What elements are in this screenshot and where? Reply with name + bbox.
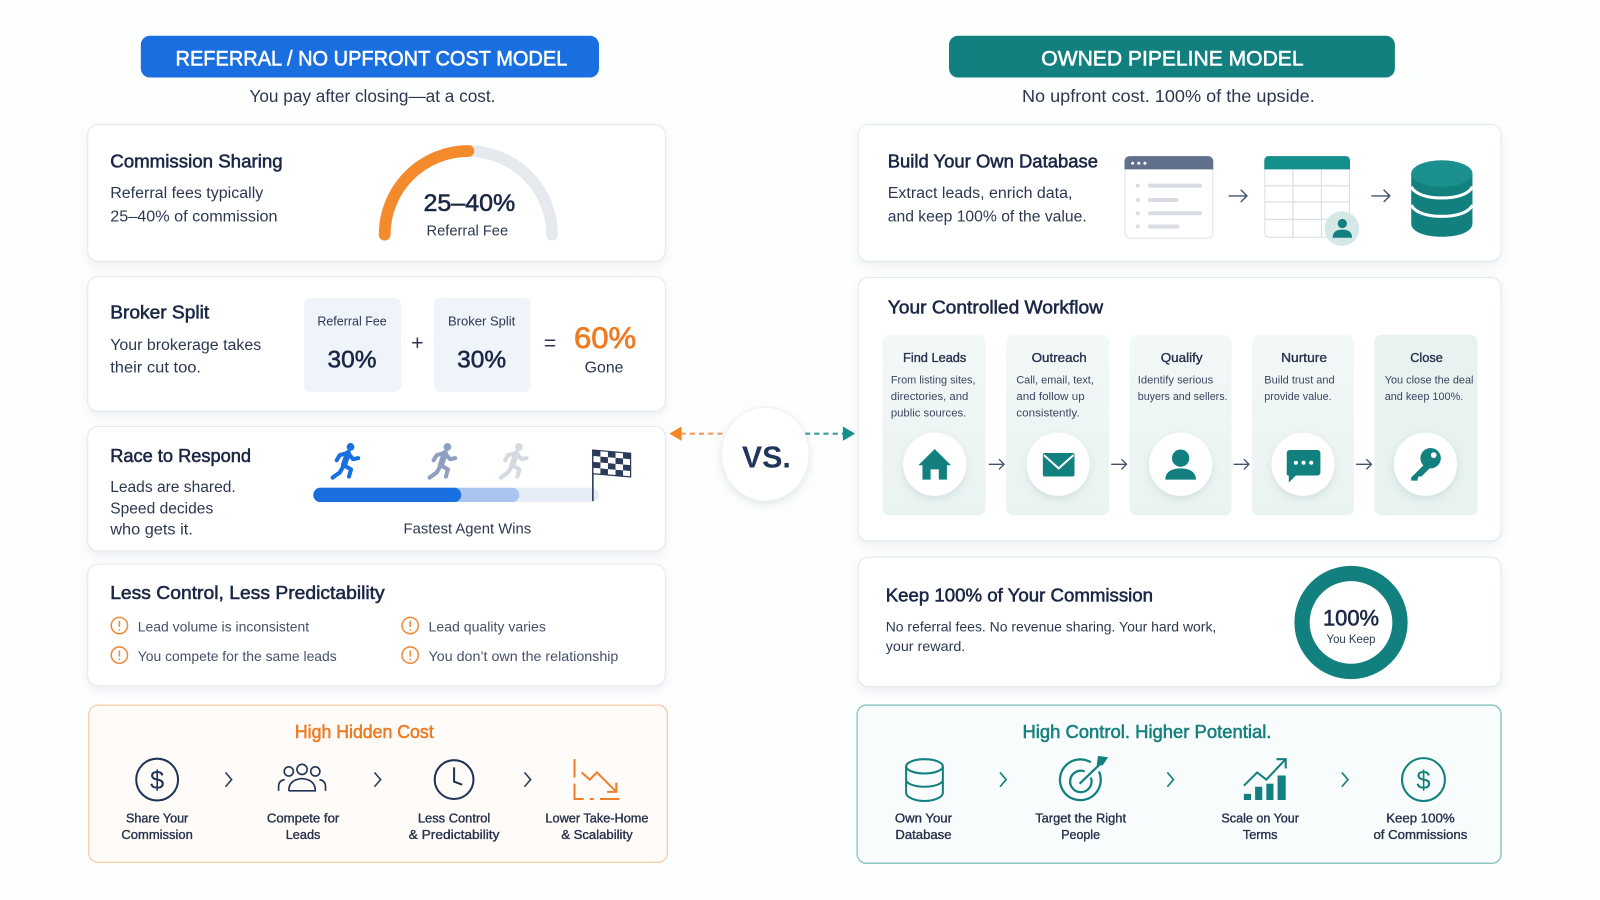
chevron [1000, 772, 1006, 787]
icon: browser list [1124, 156, 1213, 238]
step: outreach: consistently. [1016, 407, 1080, 419]
panel: your controlled workflow [858, 278, 1501, 541]
chevron [524, 772, 531, 787]
gauge chart: Referral Fee [427, 224, 508, 240]
step labels: compete for leads: Compete for [267, 810, 340, 825]
step: nurture: provide value. [1264, 391, 1332, 403]
step labels: keep 100% of commissions: Keep 100% [1386, 810, 1455, 825]
step: qualify [1130, 335, 1232, 515]
referral fee box [304, 298, 401, 392]
runner: leader [333, 443, 358, 478]
broker split box: Broker Split [448, 314, 516, 329]
total: 60% gone [574, 322, 636, 376]
step: qualify: Qualify [1161, 350, 1203, 365]
step labels: share your commission: Commission [121, 827, 193, 842]
description: No referral fees. No revenue sharing. Your hard work, [886, 620, 1216, 636]
description: Extract leads, enrich data, [888, 185, 1072, 202]
icon: clock [435, 760, 473, 799]
step: close: You close the deal [1385, 375, 1473, 387]
step: qualify: Identify serious [1138, 375, 1214, 387]
step: close [1374, 335, 1478, 515]
total: 60% gone: 60% [574, 322, 636, 355]
runner: third [501, 443, 527, 478]
description: their cut too. [110, 359, 201, 376]
description [110, 337, 262, 376]
left header: referral model [141, 36, 599, 78]
icon: target with arrow [1060, 757, 1106, 800]
bar caption: Fastest Agent Wins [404, 522, 531, 538]
left subtitle: You pay after closing—at a cost. [249, 86, 495, 106]
step: outreach [1006, 335, 1109, 515]
total: 60% gone: Gone [585, 359, 623, 376]
heading: Build Your Own Database [888, 150, 1098, 171]
step: find leads: directories, and [891, 391, 968, 403]
icon: database [1411, 160, 1472, 237]
broker split box [434, 298, 531, 392]
step labels: scale on your terms [1221, 810, 1300, 842]
warning: lead volume: Lead volume is inconsistent [138, 620, 309, 635]
step labels: less control [409, 810, 500, 842]
step: close: Close [1410, 350, 1443, 365]
heading: Race to Respond [110, 445, 251, 466]
vs badge: VS. [742, 440, 791, 474]
warning: same leads: You compete for the same leads [138, 649, 337, 664]
right header: owned pipeline model: OWNED PIPELINE MODEL [1041, 47, 1304, 70]
step labels: lower take-home: & Scalability [561, 827, 633, 842]
panel: less control, less predictability [88, 564, 665, 686]
step labels: compete for leads [267, 810, 340, 842]
arrow [1371, 190, 1390, 202]
step labels: share your commission: Share Your [126, 810, 189, 825]
panel: commission sharing [88, 124, 665, 261]
right subtitle: No upfront cost. 100% of the upside. [1022, 86, 1315, 106]
panel: high hidden cost [89, 705, 667, 862]
panel: build your own database [858, 124, 1501, 261]
step labels: own your database: Own Your [895, 810, 953, 825]
step labels: scale on your terms: Terms [1243, 827, 1278, 842]
step labels: less control: & Predictability [409, 827, 500, 842]
arrow [989, 459, 1004, 469]
step labels: keep 100% of commissions [1373, 810, 1467, 842]
step: find leads: public sources. [891, 407, 966, 419]
referral fee box: 30% [328, 346, 377, 373]
chevron [1167, 772, 1173, 787]
donut chart: 100% [1302, 573, 1400, 671]
runner: second [430, 443, 455, 478]
step labels: less control: Less Control [418, 810, 490, 825]
panel: high control higher potential [857, 705, 1501, 863]
step: nurture: Nurture [1281, 350, 1327, 365]
description: your reward. [886, 639, 965, 655]
description: Leads are shared. [110, 479, 236, 496]
arrow [1111, 459, 1127, 469]
right header: owned pipeline model [949, 36, 1395, 78]
icon: database outline [906, 759, 943, 801]
step labels: target the right people [1035, 810, 1126, 842]
warning: relationship: You don’t own the relationship [429, 649, 619, 664]
arrow [1234, 459, 1249, 469]
gauge chart: 25–40% [423, 190, 515, 217]
description: Referral fees typically [110, 185, 264, 202]
icon: dollar coin: $ [1416, 767, 1431, 795]
broker split box: 30% [457, 346, 506, 373]
step labels: keep 100% of commissions: of Commissions [1373, 827, 1467, 842]
progress bar [313, 488, 599, 502]
step labels: lower take-home [545, 810, 648, 842]
description: and keep 100% of the value. [888, 208, 1087, 225]
description [109, 479, 236, 539]
warning: lead quality [402, 617, 546, 635]
step: outreach: Call, email, text, [1016, 375, 1094, 387]
step: nurture: Build trust and [1264, 375, 1335, 387]
step labels: target the right people: Target the Right [1035, 810, 1126, 825]
chevron [374, 772, 381, 787]
icon: checkered finish flag [593, 450, 631, 501]
donut chart: 100%: 100% [1323, 606, 1379, 631]
heading: High Control. Higher Potential. [1022, 721, 1271, 742]
step: outreach: Outreach [1032, 350, 1087, 365]
chevron [1342, 772, 1348, 787]
description [886, 620, 1216, 655]
heading: Your Controlled Workflow [888, 296, 1103, 317]
step labels: scale on your terms: Scale on Your [1221, 810, 1300, 825]
description [110, 185, 278, 225]
step: find leads: From listing sites, [891, 375, 976, 387]
vs badge [721, 407, 809, 501]
icon: declining chart [574, 759, 619, 799]
description: Speed decides [110, 500, 214, 517]
step labels: own your database: Database [895, 827, 952, 842]
step: outreach: and follow up [1016, 391, 1085, 403]
left header: referral model: REFERRAL / NO UPFRONT COST MODEL [176, 47, 567, 70]
description: Your brokerage takes [110, 337, 262, 354]
description: who gets it. [109, 522, 193, 539]
panel: race to respond [88, 427, 665, 551]
referral fee box: Referral Fee [317, 314, 387, 329]
panel: broker split [88, 277, 665, 411]
heading: Broker Split [110, 301, 210, 322]
plus sign: + [411, 331, 424, 355]
heading: High Hidden Cost [295, 721, 434, 742]
step labels: share your commission [121, 810, 193, 842]
arrow [1229, 190, 1247, 202]
heading: Less Control, Less Predictability [110, 582, 385, 603]
step labels: compete for leads: Leads [286, 827, 320, 842]
step labels: lower take-home: Lower Take-Home [545, 810, 648, 825]
step labels: own your database [895, 810, 953, 842]
step labels: target the right people: People [1061, 827, 1100, 842]
icon: spreadsheet with contact [1264, 156, 1359, 246]
heading: Commission Sharing [110, 150, 283, 171]
step: find leads [883, 335, 986, 515]
arrow: right dashed to owned [805, 427, 855, 441]
description: 25–40% of commission [110, 208, 278, 225]
icon: dollar coin: $ [150, 767, 164, 795]
panel: keep 100% of your commission [858, 557, 1501, 687]
step: close: and keep 100%. [1385, 391, 1463, 403]
donut chart: 100%: You Keep [1327, 633, 1376, 646]
description [888, 185, 1087, 225]
arrow: left dashed to referral [669, 427, 722, 441]
icon: growth chart [1244, 759, 1286, 800]
icon: group of people [279, 764, 326, 791]
icon: dollar coin [1402, 758, 1445, 801]
heading: Keep 100% of Your Commission [886, 585, 1153, 606]
chevron [226, 772, 232, 787]
gauge chart [385, 151, 552, 240]
arrow [1356, 459, 1371, 469]
warning: lead quality: Lead quality varies [429, 620, 546, 635]
step: find leads: Find Leads [903, 350, 966, 365]
icon: dollar coin [136, 759, 178, 801]
equals sign: = [544, 331, 556, 355]
step: nurture [1252, 335, 1354, 515]
step: qualify: buyers and sellers. [1138, 391, 1228, 403]
